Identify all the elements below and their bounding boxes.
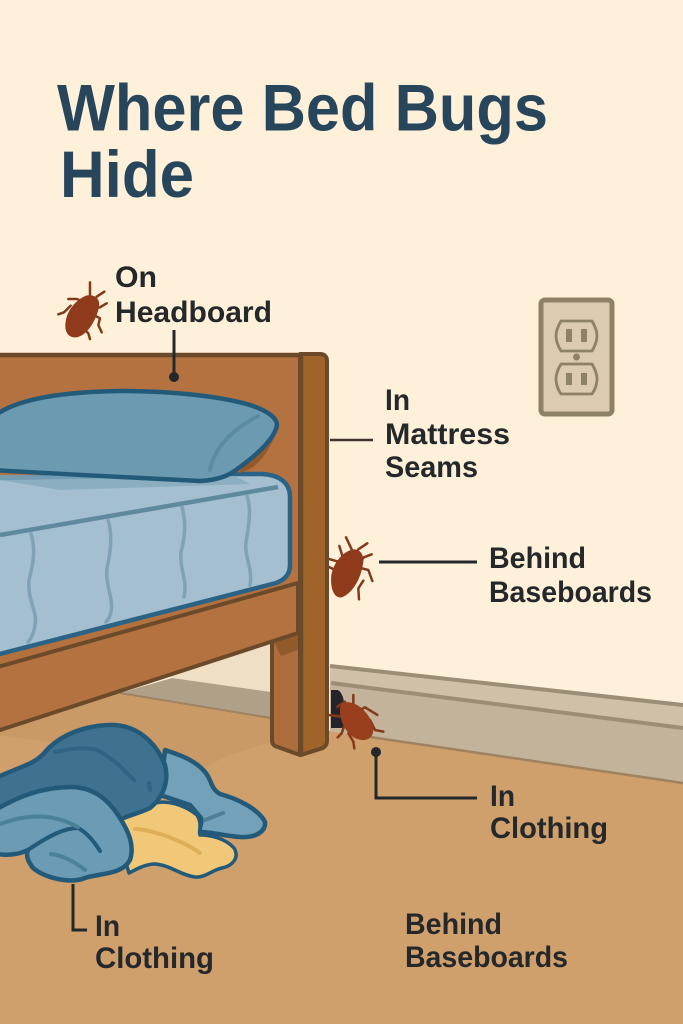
pillow shadow	[238, 430, 277, 473]
label: in clothing left: Clothing	[95, 942, 214, 975]
label: in mattress seams: Mattress	[385, 418, 510, 451]
label: in mattress seams: In	[385, 384, 410, 417]
wall shade under bed	[130, 640, 271, 692]
label: in mattress seams: Seams	[385, 451, 478, 484]
baseboard right of bed	[330, 666, 683, 783]
label: on headboard	[115, 261, 272, 329]
icon: bed bug on post	[327, 537, 372, 599]
label: on headboard: Headboard	[115, 296, 272, 329]
label: behind baseboards lower: Behind	[405, 908, 502, 941]
leader: behind baseboards	[379, 560, 477, 564]
leader: mattress seams	[330, 439, 373, 441]
label: in clothing left	[95, 910, 214, 975]
headboard	[0, 353, 300, 640]
mattress	[0, 474, 290, 656]
back blue cloth	[160, 750, 265, 837]
icon: wall outlet	[541, 300, 612, 414]
label: on headboard: On	[115, 261, 157, 294]
baseboard behind bed	[120, 678, 271, 718]
left blue cloth	[0, 787, 132, 880]
label: behind baseboards upper: Behind	[489, 542, 586, 575]
side rail	[0, 575, 300, 732]
icon: bed bug at baseboard	[328, 695, 383, 748]
title: Where Bed Bugs	[57, 70, 548, 144]
mattress seam	[0, 487, 278, 535]
label: in clothing right	[490, 780, 608, 845]
label: behind baseboards lower	[405, 908, 568, 974]
title	[57, 70, 548, 211]
leader: clothing left	[73, 884, 87, 930]
clothing pile	[0, 725, 265, 880]
label: behind baseboards upper	[489, 542, 652, 609]
cloth folds	[0, 748, 223, 870]
yellow cloth	[117, 802, 236, 877]
leader: clothing right	[371, 747, 477, 798]
title: Hide	[60, 137, 194, 211]
pillow	[0, 391, 277, 481]
label: behind baseboards lower: Baseboards	[405, 941, 568, 974]
dark blue cloth	[0, 725, 166, 822]
label: behind baseboards upper: Baseboards	[489, 576, 652, 609]
pillow crease	[210, 416, 258, 470]
label: in clothing right: In	[490, 780, 515, 813]
floor	[0, 672, 683, 1024]
leader: headboard	[169, 330, 179, 382]
bed leg	[272, 630, 300, 755]
bed post	[300, 354, 327, 755]
baseboard crack	[331, 690, 346, 728]
label: in clothing right: Clothing	[490, 812, 608, 845]
icon: bed bug top	[58, 282, 107, 339]
label: in clothing left: In	[95, 910, 120, 943]
label: in mattress seams	[385, 384, 510, 484]
